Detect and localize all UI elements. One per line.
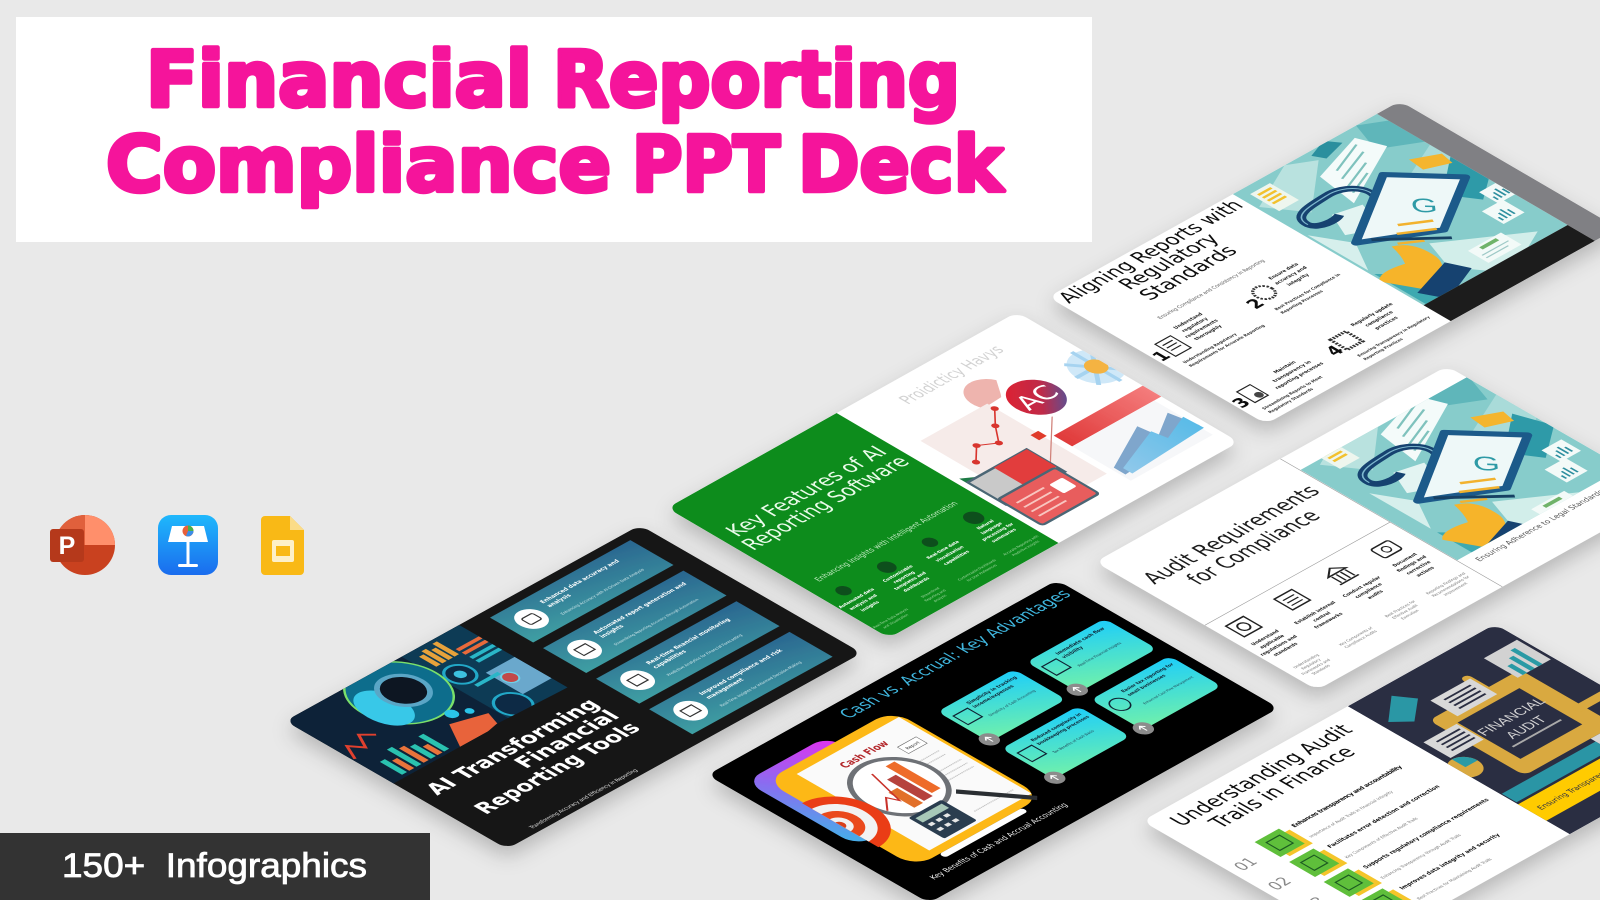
row 1: Enhances transparency and accountability [1290, 765, 1404, 829]
title [106, 36, 1005, 210]
item 1: thoroughly [1193, 324, 1225, 342]
subtitle: Key Benefits of Cash and Accrual Accounting [928, 802, 1070, 881]
column 1: Standards [1310, 664, 1331, 676]
row 4: Best Practices for Maintaining Audit Trails [1415, 857, 1495, 900]
column 4 [1360, 534, 1477, 601]
slide card: Key Features of AI Reporting Software [667, 305, 1252, 638]
illustration: financial audit: FINANCIAL [1474, 695, 1550, 738]
column 3: audits [1366, 589, 1385, 600]
heading: Understanding Audit [1164, 721, 1358, 830]
item 2: Ensure data [1267, 262, 1301, 281]
feature columns: insights [859, 600, 882, 613]
row 1: Importance of Audit Trails in Financial Integrity [1308, 790, 1396, 839]
feature columns: Analysis [932, 594, 948, 603]
feature columns: language [979, 521, 1004, 536]
bar 1 [490, 540, 674, 642]
column 3: Best Practices for [1383, 599, 1417, 618]
illustration: AI lens and charts [290, 625, 568, 784]
column 1: regulations and [1259, 634, 1300, 657]
slide card: Cash vs. Accrual [696, 580, 1279, 900]
benefit card 2: Immediate cash flow [1054, 626, 1107, 656]
benefit card 3 [1005, 708, 1126, 784]
bar 4: management [705, 678, 746, 700]
heading: for Compliance [1181, 507, 1327, 589]
feature columns: processing for [980, 522, 1016, 542]
row 2: Key Components of Effective Audit Trails [1343, 816, 1421, 860]
illustration: cash flow report: Report [904, 741, 922, 751]
column 1 [1224, 616, 1330, 675]
item 3: transparency in [1271, 360, 1314, 383]
feature columns: Customizable [881, 564, 915, 583]
bar 4: Improved compliance and risk [698, 649, 785, 696]
bar 1: Enhanced data accuracy and [539, 559, 622, 605]
column 2 [1272, 588, 1377, 648]
heading: Aligning Reports with [1052, 196, 1249, 307]
item 2: Reporting Processes [1279, 289, 1326, 315]
feature columns: Accurate Reporting with [1002, 535, 1040, 556]
title: Compliance [106, 121, 611, 210]
column 3: compliance [1354, 582, 1385, 599]
benefit card 4: small businesses [1126, 674, 1168, 697]
column 2: Key Components of [1337, 626, 1374, 646]
subtitle: Transforming Accuracy and Efficiency in Reporting [527, 768, 640, 830]
subtitle: Enhancing Insights with Intelligent Automation [812, 500, 960, 583]
heading: Regulatory [1112, 230, 1225, 293]
column 1: applicable [1258, 634, 1287, 650]
item 3: Regulatory Standards [1267, 387, 1316, 414]
row 2: Facilitates error detection and correction [1327, 785, 1442, 849]
item 3 [1232, 361, 1324, 414]
icon: PowerPoint: P [59, 532, 75, 560]
column 4: actions [1415, 566, 1437, 578]
item 4: practices [1373, 316, 1400, 331]
column 3: Conduct regular [1341, 575, 1383, 599]
feature columns: Real-time data [925, 540, 961, 560]
item 3: Maintain [1272, 360, 1298, 375]
item 3: reporting processes [1274, 361, 1326, 390]
row 3 [1292, 794, 1510, 900]
illustration: compliance desk [1300, 378, 1600, 560]
column 1: Understand [1250, 629, 1282, 647]
feature columns [835, 512, 1040, 628]
feature columns: Streamlined [920, 587, 941, 599]
bar 2: insights [599, 624, 626, 639]
item 3: 3 [1228, 395, 1256, 411]
row 2 [1257, 782, 1462, 897]
badge: 150+ Infographics: 150+ Infographics [62, 847, 367, 885]
column 4: corrective [1405, 560, 1433, 576]
column 1: Frameworks and [1300, 658, 1332, 676]
item 2: 2 [1242, 296, 1270, 312]
item 2: integrity [1286, 272, 1312, 287]
title: Reporting [553, 36, 960, 125]
item 1: requirements [1183, 319, 1220, 339]
heading: Standards [1133, 242, 1243, 304]
feature columns: dashboards [902, 576, 932, 593]
benefit card 1: Simplicity of Cash Accounting [988, 689, 1037, 717]
column 2: Compliance Audits [1343, 629, 1378, 649]
icon: PowerPoint [50, 515, 115, 575]
bar 3: Predictive Analytics for Financial Forecasting [665, 633, 744, 677]
item 2 [1246, 263, 1340, 314]
illustration: AI dashboard: AC [1008, 381, 1067, 415]
heading: Financial [508, 707, 625, 772]
feature columns: summaries [990, 528, 1019, 544]
illustration: compliance desk [1233, 114, 1568, 306]
bar 2: Automated report generation and [592, 582, 689, 635]
row 3: Enhancing Transparency through Audit Trails [1379, 833, 1464, 880]
heading: Key Features of AI [720, 442, 893, 540]
bar 2 [543, 571, 727, 673]
gray side strip [1377, 101, 1600, 241]
column 2: Establish internal [1293, 600, 1338, 626]
item 1: regulatory [1180, 316, 1211, 333]
bar 4: Real-Time Insights for Informed Decision-Making [718, 660, 803, 707]
benefit card 3: Tax Benefits of Cash Basis [1051, 730, 1095, 754]
benefit card 2: Real-Time Financial Insights [1077, 642, 1123, 667]
illustration: cash flow report [754, 716, 1038, 862]
column 1: Regulatory [1300, 657, 1322, 670]
benefit card 1 [941, 671, 1062, 746]
heading: Audit Requirements [1137, 482, 1327, 588]
benefit card 3: Reduced complexity in [1029, 712, 1084, 743]
item 2: accuracy and [1273, 265, 1310, 286]
slide card: Aligning Reports with Regulatory Standards [1050, 104, 1600, 438]
benefit card 4: Easier tax reporting for [1120, 662, 1176, 694]
title: PPT [632, 121, 780, 210]
column 1: standards [1272, 642, 1300, 657]
subtitle: Ensuring Compliance and Consistency in Reporting [1157, 259, 1267, 320]
heading: Reporting Tools [468, 719, 646, 817]
faded label: Proidicticy Havys [894, 343, 1009, 407]
column 3 [1312, 558, 1431, 626]
icon: Keynote [158, 515, 218, 575]
title: Deck [798, 121, 1005, 210]
title: Financial [146, 36, 532, 125]
feature columns: Real-Time Data Analysis [872, 608, 910, 629]
illustration: financial audit [1342, 624, 1600, 838]
feature columns: for User Preferences [966, 564, 998, 582]
column 4: Improvement [1442, 581, 1469, 597]
illustration: AI dashboard [920, 350, 1212, 526]
benefit card 3: bookkeeping processes [1035, 715, 1092, 746]
benefit card 4 [1094, 658, 1218, 734]
column 2: frameworks [1313, 612, 1345, 630]
row 3: Supports regulatory compliance requirements [1362, 798, 1492, 870]
item 4: Regularly update [1350, 302, 1395, 328]
bar 3 [596, 601, 780, 704]
column 3: Effective Audit [1391, 603, 1419, 620]
row 2: 02 [1263, 875, 1296, 893]
illustration: cash flow report: Cash Flow [836, 739, 892, 770]
column 4: Document [1391, 552, 1420, 568]
icon: Google Slides [261, 516, 304, 575]
column 4: findings and [1396, 555, 1429, 573]
benefit card 2 [1030, 620, 1153, 696]
bar 3: Real-time financial monitoring [645, 618, 732, 666]
feature columns: Predictive Insights [1011, 540, 1041, 557]
heading: Reporting Software [736, 452, 915, 554]
feature columns: Natural [975, 519, 997, 531]
feature columns: Customizable Dashboards [957, 558, 998, 581]
heading: AI Transforming [420, 695, 605, 798]
feature columns: analysis and [848, 594, 879, 611]
title panel [16, 17, 1092, 242]
row 4: Improves data integrity and security [1399, 833, 1502, 891]
item 1: Understanding Regulatory [1181, 332, 1239, 365]
heading [428, 700, 639, 814]
column 1: Understanding [1291, 653, 1321, 669]
column 4: Recommendations for [1430, 575, 1471, 598]
item 4: Ensuring Transparency in Regulatory [1356, 315, 1432, 357]
feature columns: reporting [892, 570, 917, 585]
bar 1: Enhancing Accuracy with AI-Driven Data Analysis [559, 568, 645, 616]
feature columns: Automated data [837, 587, 877, 610]
item 1: Requirements for Accurate Reporting [1187, 324, 1267, 368]
feature columns: visualization [934, 545, 966, 563]
bar 2: Streamlining Reporting Accuracy through Automation [613, 598, 700, 646]
item 4: compliance [1364, 310, 1396, 328]
feature columns: templates and [893, 571, 928, 591]
item 4: Reporting Practices [1362, 337, 1405, 361]
illustration: financial audit: AUDIT [1502, 714, 1550, 741]
black bottom strip [1424, 225, 1595, 321]
column 3: Execution [1399, 608, 1420, 620]
row 1 [1223, 763, 1425, 877]
slide card: Audit Requirements for Compliance [1097, 369, 1600, 704]
item 1 [1152, 312, 1266, 367]
benefit card 1: Simplicity in tracking [965, 675, 1020, 706]
column 4: Reporting Findings and [1424, 571, 1467, 595]
heading: Cash vs. Accrual: Key Advantages [834, 586, 1076, 721]
feature columns: and Visualization [882, 613, 910, 629]
item 4 [1328, 303, 1430, 360]
row 4 [1326, 829, 1520, 900]
benefit card 1: income/expenses [971, 684, 1016, 709]
bar 1: analysis [546, 593, 574, 609]
benefit card 2: visibility [1060, 645, 1086, 660]
feature columns: Reporting and [923, 589, 947, 602]
item 3: Streamlining Reports to Meet [1261, 375, 1325, 411]
item 4: 4 [1322, 343, 1350, 359]
feature columns: capabilities [942, 550, 972, 566]
divider lines [1204, 458, 1502, 626]
benefit card 4: Enhanced Cash Flow Management [1142, 675, 1195, 705]
slide card: AI Transforming Financial Reporting Tools [275, 519, 862, 849]
bar 3: capabilities [652, 649, 689, 670]
column 2: control [1311, 611, 1333, 623]
green panel [667, 413, 1059, 638]
slide card: Understanding Audit Trails in Finance [1142, 624, 1600, 900]
item 1: Understand [1172, 312, 1205, 330]
badge: 150+ Infographics [0, 833, 430, 900]
row 1: 01 [1230, 855, 1262, 873]
bar 4 [649, 632, 833, 734]
item 1: 1 [1148, 349, 1176, 365]
item 2: Best Practices for Compliance in [1273, 273, 1343, 312]
heading: Trails in Finance [1202, 743, 1361, 832]
